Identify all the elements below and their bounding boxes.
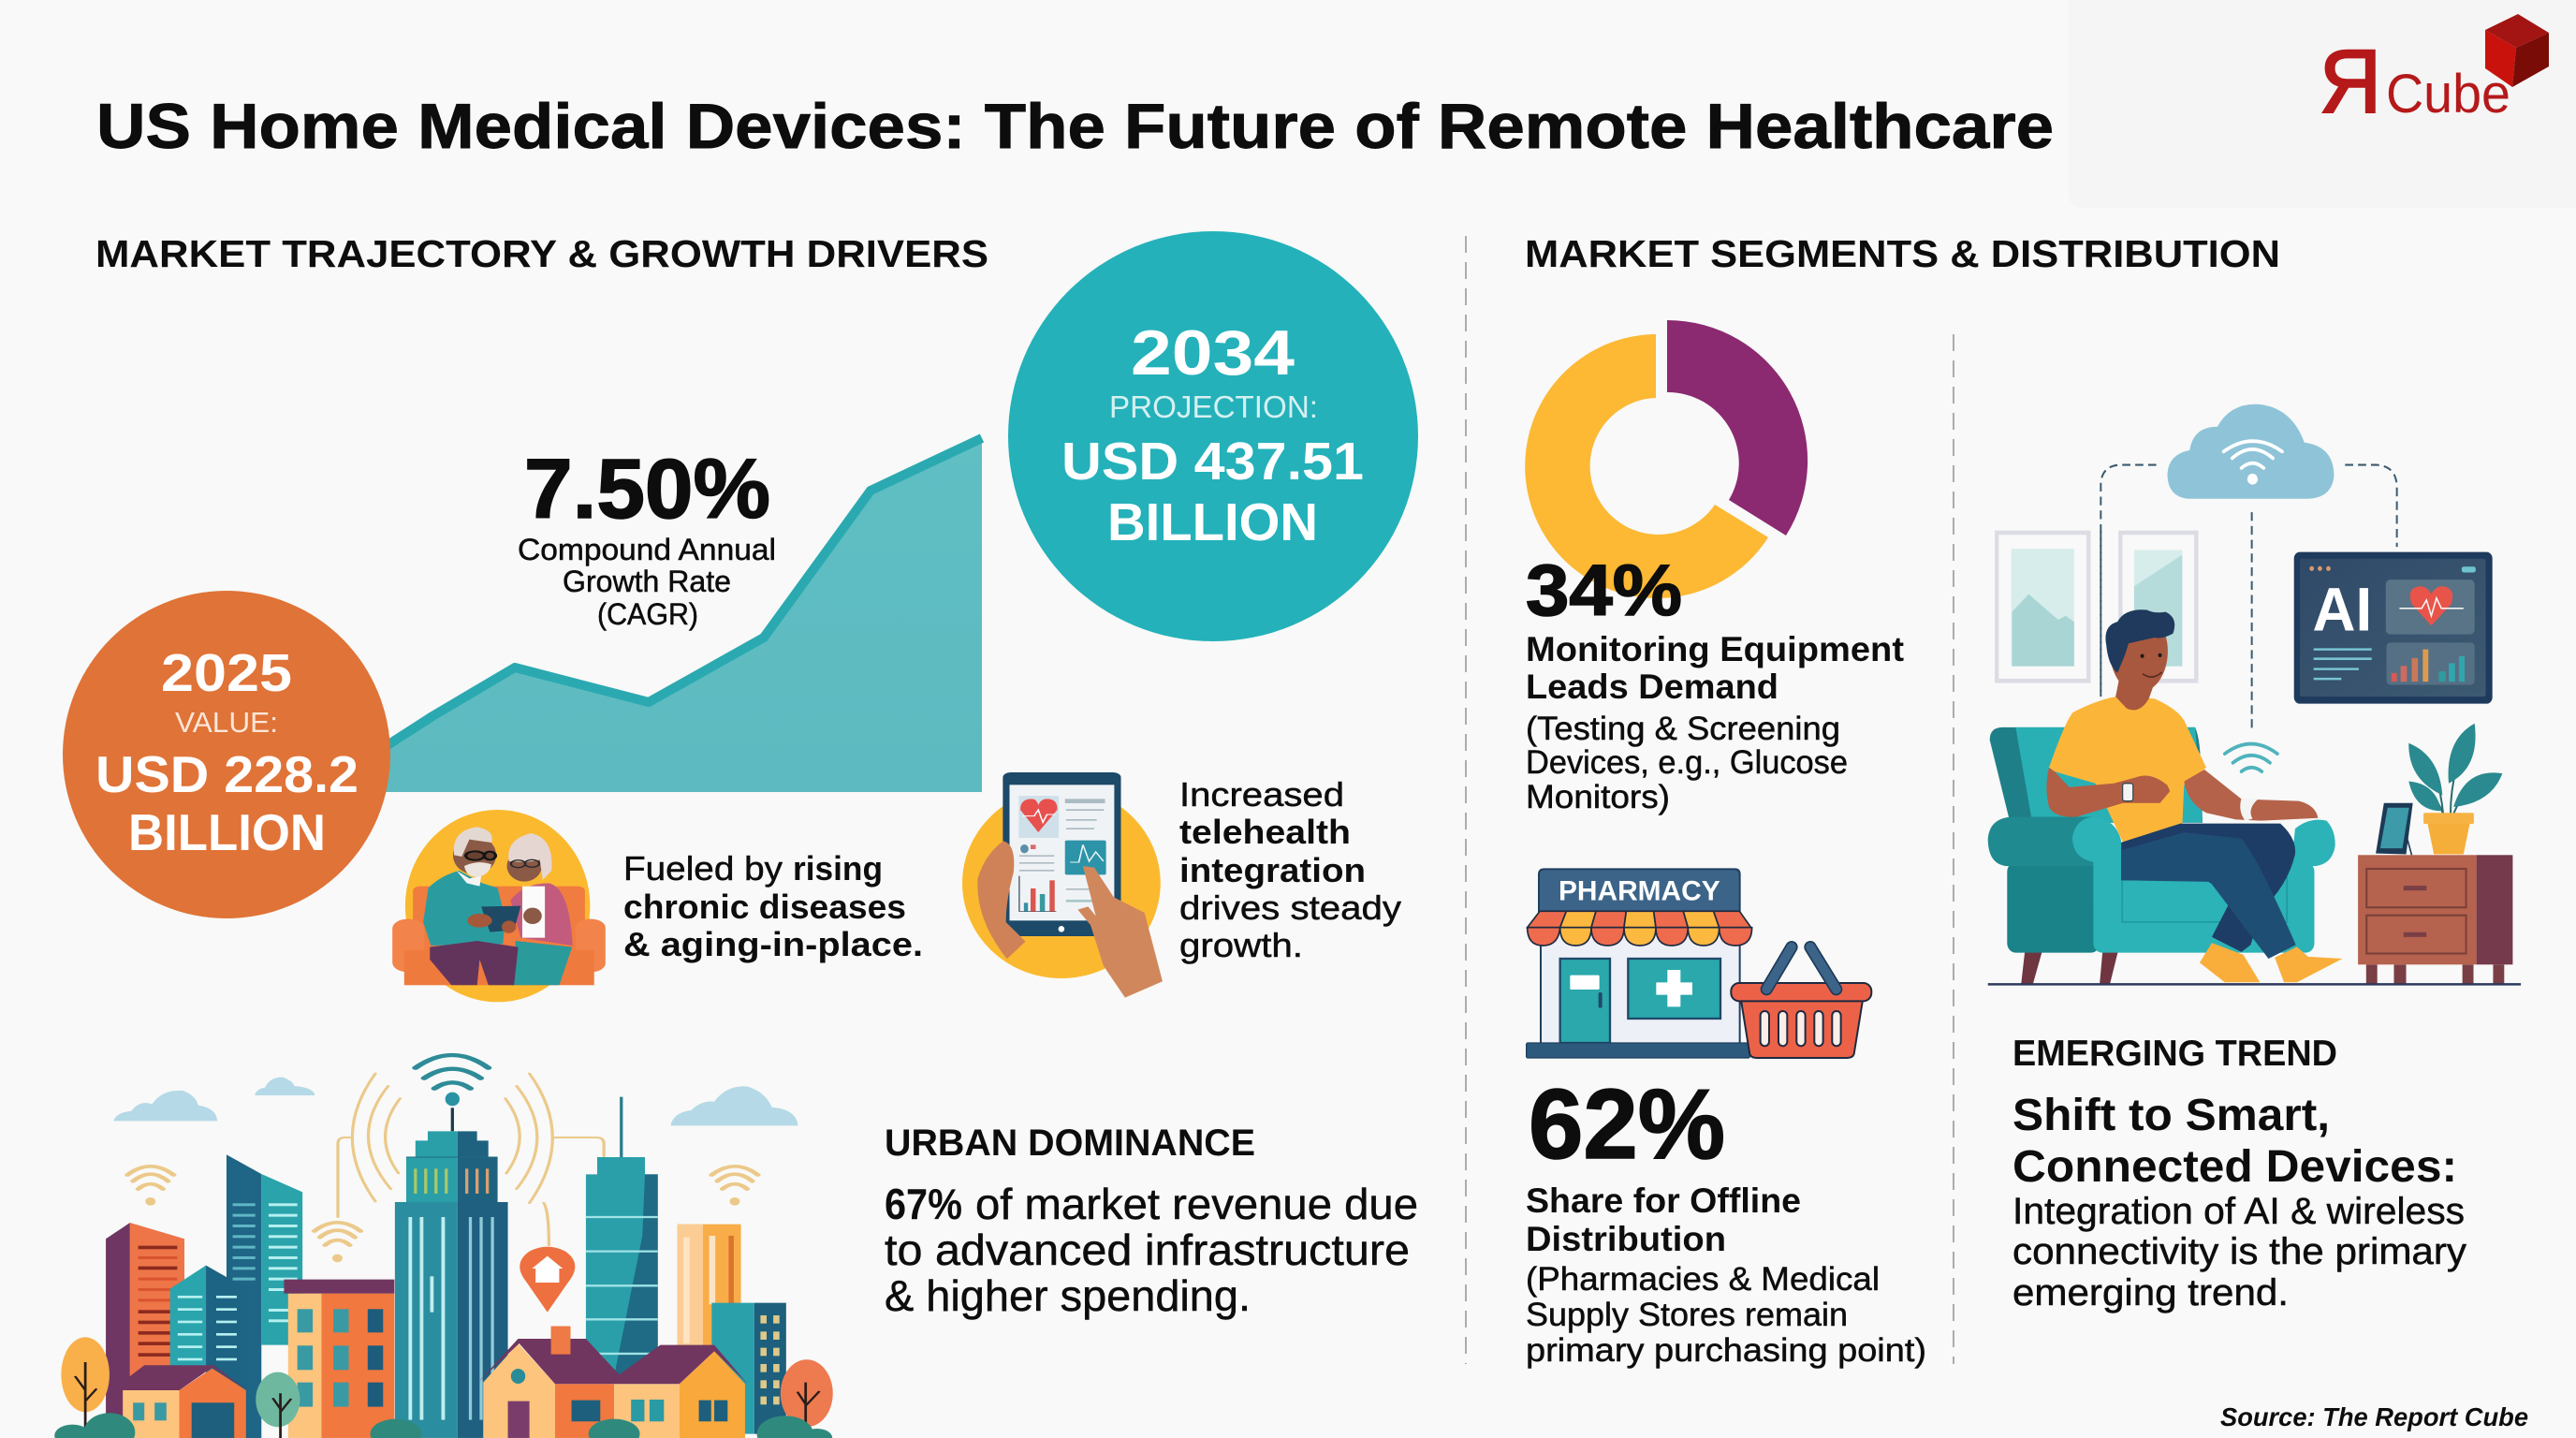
text: telehealth integration: telehealth <box>1179 813 1351 851</box>
stat: 62% offline distribution: Supply Stores remain <box>1526 1297 1848 1333</box>
icon: pharmacy store and basket <box>1527 869 1871 1058</box>
text: emerging trend: Integration of AI & wireless <box>2012 1191 2465 1232</box>
stat: 62% offline distribution: Share for Offline <box>1526 1181 1801 1220</box>
circle: 2025 value: 2025 <box>161 643 292 703</box>
logo: RCube <box>2320 14 2549 132</box>
stat: 62% offline distribution: 62% <box>1529 1069 1725 1180</box>
text: emerging trend <box>2012 1034 2466 1313</box>
illustration: man in armchair with connected devices <box>1988 404 2521 984</box>
heading: market segments: MARKET SEGMENTS & DISTRIBUTION <box>1525 232 2280 275</box>
illustration: connected city <box>54 1055 833 1438</box>
text: telehealth integration: drives steady <box>1179 888 1401 927</box>
CAGR callout: (CAGR) <box>597 597 698 631</box>
stat: 62% offline distribution: primary purchasing point) <box>1526 1332 1926 1369</box>
text: telehealth integration: Increased <box>1179 775 1344 814</box>
area chart: growth <box>370 438 982 792</box>
text: urban dominance: to advanced infrastructure <box>885 1225 1410 1274</box>
stat: 62% offline distribution: (Pharmacies & Medical <box>1526 1261 1880 1298</box>
heading: market trajectory: MARKET TRAJECTORY & GROWTH DRIVERS <box>95 232 988 275</box>
circle: 2034 projection: 2034 <box>1131 317 1295 389</box>
text: emerging trend: connectivity is the primary <box>2012 1231 2466 1272</box>
stat: 62% offline distribution <box>1526 1069 1926 1369</box>
stat: 34% monitoring equipment: Monitoring Equipment <box>1526 630 1904 668</box>
text: telehealth integration: growth. <box>1179 926 1303 964</box>
text: emerging trend: emerging trend. <box>2012 1272 2289 1313</box>
text: emerging trend: Connected Devices: <box>2012 1142 2457 1192</box>
stat: 34% monitoring equipment: 34% <box>1526 550 1682 631</box>
title: US Home Medical Devices: The Future of Remote Healthcare <box>96 91 2054 162</box>
text: urban dominance <box>885 1123 1418 1320</box>
icon: pharmacy store and basket: PHARMACY <box>1559 876 1720 907</box>
circle: 2025 value: USD 228.2 <box>95 745 359 803</box>
CAGR callout <box>518 443 776 631</box>
stat: 34% monitoring equipment: (Testing & Screening <box>1526 711 1840 747</box>
logo: RCube: Я <box>2320 32 2381 132</box>
text: urban dominance: URBAN DOMINANCE <box>885 1123 1255 1164</box>
circle: 2034 projection: USD 437.51 <box>1061 432 1364 492</box>
text: telehealth integration: integration <box>1179 851 1366 889</box>
text: rising chronic diseases <box>623 849 923 963</box>
donut chart <box>1525 320 1808 598</box>
stat: 34% monitoring equipment: Monitors) <box>1526 779 1670 815</box>
circle: 2025 value <box>63 591 390 918</box>
text: rising chronic diseases: chronic diseases <box>623 888 906 926</box>
text: urban dominance: of market revenue due <box>975 1180 1418 1228</box>
icon: elderly couple on sofa <box>392 810 606 1002</box>
text: rising chronic diseases: rising <box>793 849 883 888</box>
stat: 34% monitoring equipment: Devices, e.g., Glucose <box>1526 744 1848 781</box>
stat: 34% monitoring equipment <box>1526 550 1904 815</box>
stat: 34% monitoring equipment: Leads Demand <box>1526 668 1778 706</box>
text: telehealth integration <box>1179 775 1401 964</box>
text: urban dominance: 67% <box>885 1180 962 1228</box>
circle: 2034 projection: BILLION <box>1107 492 1318 552</box>
logo: RCube: Cube <box>2386 64 2510 125</box>
illustration: man in armchair with connected devices: AI <box>2312 576 2372 644</box>
circle: 2025 value: VALUE: <box>175 706 278 739</box>
text: rising chronic diseases: Fueled by <box>623 849 783 888</box>
CAGR callout: Growth Rate <box>563 565 731 598</box>
CAGR callout: 7.50% <box>524 443 770 536</box>
stat: 62% offline distribution: Distribution <box>1526 1220 1726 1258</box>
circle: 2034 projection: PROJECTION: <box>1109 389 1318 424</box>
text: rising chronic diseases: & aging-in-place. <box>623 925 923 963</box>
text: emerging trend: EMERGING TREND <box>2012 1034 2337 1074</box>
circle: 2034 projection <box>1008 231 1418 641</box>
source note: Source: The Report Cube <box>2220 1402 2528 1431</box>
text: emerging trend: Shift to Smart, <box>2012 1091 2330 1140</box>
text: urban dominance: & higher spending. <box>885 1271 1251 1320</box>
circle: 2025 value: BILLION <box>128 803 326 861</box>
CAGR callout: Compound Annual <box>518 533 776 566</box>
icon: tablet with hands <box>962 772 1163 998</box>
